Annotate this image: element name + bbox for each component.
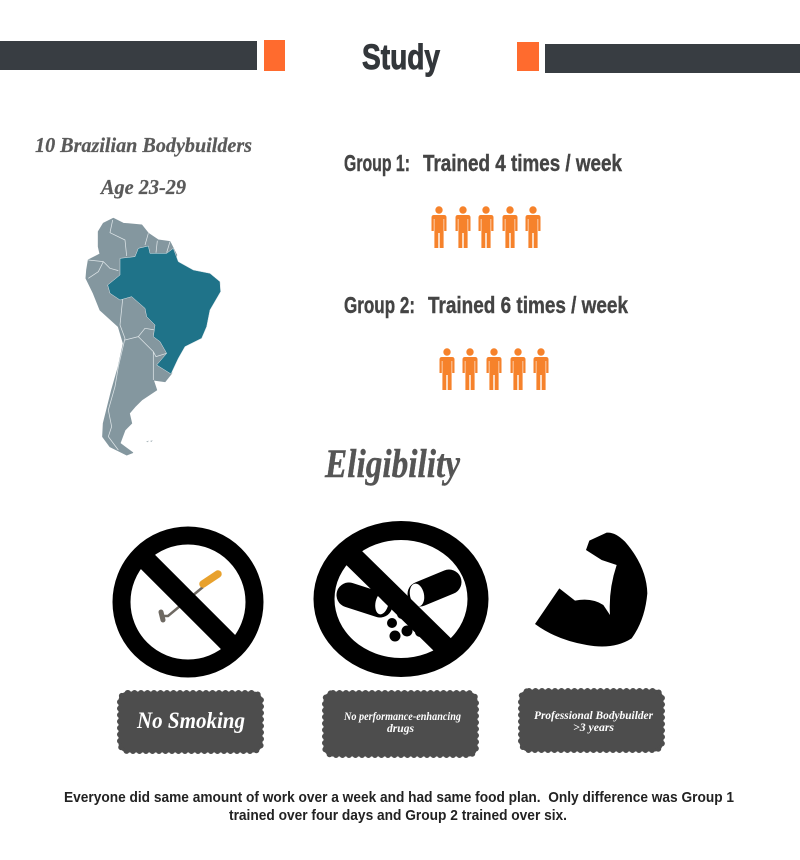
badge: professional bodybuilder bbox=[521, 691, 662, 750]
text: group 2: Trained 6 times / week bbox=[428, 292, 628, 318]
text: group 2 bbox=[344, 292, 628, 318]
map: South America with Brazil highlighted bbox=[86, 218, 221, 455]
text: participants bbox=[35, 133, 252, 199]
text: summary: Everyone did same amount of work over a week and had same food plan. Only difference was Group 1 bbox=[64, 789, 734, 806]
badge: no performance-enhancing drugs: drugs bbox=[387, 721, 414, 735]
badge: no performance-enhancing drugs bbox=[325, 693, 476, 755]
icon: no smoking bbox=[122, 536, 254, 668]
badge: professional bodybuilder: >3 years bbox=[573, 720, 614, 734]
text: summary: trained over four days and Group 2 trained over six. bbox=[229, 807, 567, 824]
text: participants: 10 Brazilian Bodybuilders bbox=[35, 133, 252, 157]
header band bbox=[0, 40, 800, 73]
text: group 2: Group 2: bbox=[344, 292, 415, 318]
heading: eligibility: Eligibility bbox=[324, 441, 460, 486]
icon: flexed arm bbox=[535, 533, 647, 646]
text: participants: Age 23-29 bbox=[99, 175, 186, 199]
badge: no smoking: No Smoking bbox=[136, 708, 245, 733]
badge: no performance-enhancing drugs: No performance-enhancing bbox=[343, 709, 461, 723]
icons: group 2 people bbox=[440, 348, 548, 390]
text: group 1: Group 1: bbox=[344, 150, 410, 176]
badge: professional bodybuilder: Professional Bodybuilder bbox=[534, 708, 653, 722]
badge: no smoking bbox=[120, 693, 261, 751]
text: group 1: Trained 4 times / week bbox=[423, 150, 622, 176]
text: group 1 bbox=[344, 150, 622, 176]
icon: no drugs bbox=[314, 521, 488, 677]
title: Study bbox=[362, 38, 440, 77]
icons: group 1 people bbox=[432, 206, 540, 248]
text: summary bbox=[64, 789, 734, 824]
